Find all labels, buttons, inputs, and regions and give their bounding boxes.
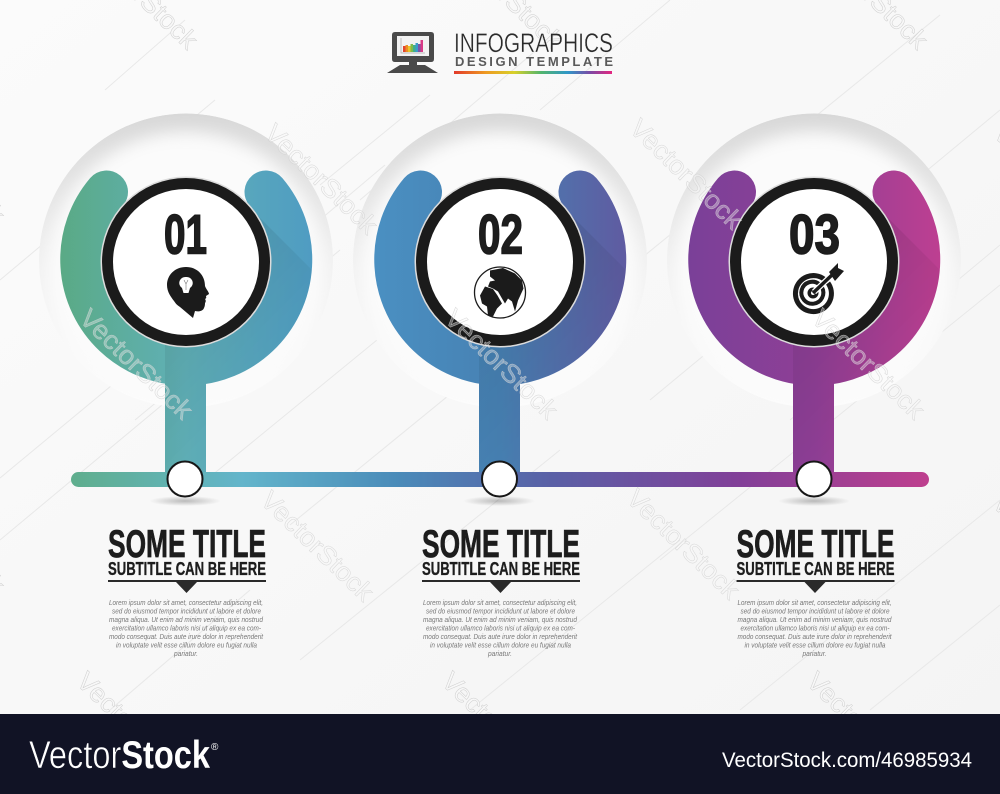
body copy: in voluptate velit esse cillum dolore eu fugiat nulla <box>116 642 257 649</box>
step 1 medallion <box>40 114 332 472</box>
header: infographics logo <box>387 28 613 74</box>
icon: target with arrow <box>795 263 844 312</box>
timeline node 3 <box>796 462 832 496</box>
body copy: magna aliqua. Ut enim ad minim veniam, quis nostrud <box>423 617 578 624</box>
body copy: pariatur. <box>802 651 827 658</box>
body copy: modo consequat. Duis aute irure dolor in reprehenderit <box>109 634 264 641</box>
body copy: sed do eiusmod tempor incididunt ut labore et dolore <box>112 609 261 616</box>
body copy <box>109 600 264 658</box>
body copy: exercitation ullamco laboris nisi ut aliquip ex ea com- <box>112 626 262 633</box>
icon: head with light bulb <box>167 267 209 318</box>
timeline node 1 <box>168 462 202 496</box>
timeline bar <box>71 472 929 487</box>
body copy: exercitation ullamco laboris nisi ut aliquip ex ea com- <box>426 626 576 633</box>
rule with pointer <box>422 580 580 593</box>
U-shaped band with stem <box>82 192 291 479</box>
number 01: 01 <box>164 202 207 266</box>
long shadow <box>165 218 310 402</box>
step 2 medallion <box>354 114 646 472</box>
body copy: modo consequat. Duis aute irure dolor in reprehenderit <box>738 634 892 641</box>
icon: globe <box>474 267 526 318</box>
subheading: design template: DESIGN TEMPLATE <box>455 54 613 69</box>
title: SOME TITLE <box>736 523 894 566</box>
number 03: 03 <box>789 202 840 266</box>
black ring badge <box>728 176 900 348</box>
recessed disc <box>667 114 961 410</box>
body copy <box>738 600 893 658</box>
watermarks over medallions <box>74 113 932 608</box>
body copy: Lorem ipsum dolor sit amet, consectetur adipiscing elit, <box>423 600 577 607</box>
text block 2 <box>422 523 580 658</box>
body copy: magna aliqua. Ut enim ad minim veniam, quis nostrud <box>109 617 264 624</box>
body copy: Lorem ipsum dolor sit amet, consectetur adipiscing elit, <box>109 600 263 607</box>
footer URL: VectorStock.com/46985934 <box>722 749 972 772</box>
body copy: sed do eiusmod tempor incididunt ut labore et dolore <box>426 609 575 616</box>
watermarks over medallions: VectorStock <box>439 303 565 426</box>
rule with pointer <box>108 580 266 593</box>
number 02: 02 <box>478 202 523 266</box>
black ring badge <box>414 176 586 348</box>
watermarks over medallions: VectorStock <box>621 483 747 606</box>
watermarks over medallions: VectorStock <box>255 485 381 608</box>
rainbow rule <box>454 71 612 74</box>
watermark layer: VectorStock <box>801 666 927 789</box>
body copy: sed do eiusmod tempor incididunt ut labore et dolore <box>740 609 890 616</box>
step 3 medallion <box>668 114 960 472</box>
footer logo: VectorStock <box>29 734 210 777</box>
watermarks over medallions: VectorStock <box>806 303 932 426</box>
body copy: in voluptate velit esse cillum dolore eu fugiat nulla <box>430 642 571 649</box>
long shadow <box>793 218 938 382</box>
body copy: Lorem ipsum dolor sit amet, consectetur adipiscing elit, <box>738 600 892 607</box>
timeline node 2 <box>482 462 517 496</box>
body copy: pariatur. <box>173 651 198 658</box>
body copy: magna aliqua. Ut enim ad minim veniam, quis nostrud <box>738 617 893 624</box>
rule with pointer <box>736 580 894 593</box>
watermarks over medallions: VectorStock <box>624 113 750 236</box>
footer bar <box>0 714 1000 794</box>
body copy <box>423 600 578 658</box>
U-shaped band with stem <box>710 192 919 479</box>
watermarks over medallions: VectorStock <box>259 118 385 241</box>
registered mark: ® <box>211 742 219 753</box>
body copy: in voluptate velit esse cillum dolore eu fugiat nulla <box>744 642 886 649</box>
black ring badge <box>100 176 272 348</box>
recessed disc <box>353 114 647 410</box>
text block 3 <box>736 523 894 658</box>
body copy: pariatur. <box>487 651 512 658</box>
subtitle: SUBTITLE CAN BE HERE <box>736 559 894 579</box>
icon: computer monitor with chart <box>387 32 438 73</box>
long shadow <box>479 218 614 402</box>
body copy: exercitation ullamco laboris nisi ut aliquip ex ea com- <box>740 626 890 633</box>
watermarks over medallions: VectorStock <box>74 303 200 426</box>
watermark layer: VectorStock <box>71 666 197 789</box>
body copy: modo consequat. Duis aute irure dolor in reprehenderit <box>423 634 578 641</box>
watermark layer: VectorStock <box>436 666 562 789</box>
subtitle: SUBTITLE CAN BE HERE <box>422 559 580 579</box>
subtitle: SUBTITLE CAN BE HERE <box>108 559 266 579</box>
U-shaped band with stem <box>396 192 605 479</box>
title: SOME TITLE <box>108 523 266 566</box>
heading: infographics: INFOGRAPHICS <box>454 28 613 58</box>
timeline node shadows <box>149 496 850 506</box>
recessed disc <box>39 114 333 410</box>
text block 1 <box>108 523 266 658</box>
title: SOME TITLE <box>422 523 580 566</box>
